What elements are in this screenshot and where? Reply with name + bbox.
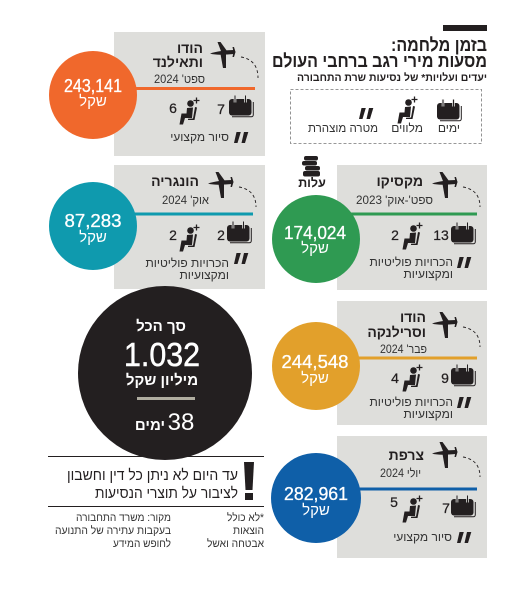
panel: Hungary: [49, 165, 265, 289]
cost circle: [272, 322, 360, 410]
icon: plane: [208, 172, 256, 207]
days and companions: 2: [391, 227, 399, 243]
panel: India and Thailand: [49, 32, 265, 156]
total circle: 1.032: [124, 336, 200, 373]
days and companions: [169, 222, 251, 252]
destination heading: הודו: [400, 309, 426, 325]
cost circle: [271, 453, 361, 543]
connector line: [350, 488, 477, 490]
days and companions: 7: [442, 500, 450, 516]
stated purpose: ומקצועיות: [404, 267, 453, 281]
stated purpose: סיור מקצועי: [170, 130, 229, 144]
icon: calendar legend: [437, 100, 461, 121]
stated purpose: סיור מקצועי: [393, 530, 452, 544]
cost circle: 243,141: [64, 76, 122, 96]
cost circle: שקל: [301, 370, 329, 387]
footnote: [207, 511, 265, 550]
destination heading: פבר' 2024: [380, 342, 427, 356]
cost circle: 282,961: [284, 484, 348, 504]
title: מסעות מירי רגב ברחבי העולם: [272, 50, 487, 71]
cost circle: שקל: [301, 240, 329, 257]
destination heading: ספט' 2024: [154, 72, 205, 86]
destination heading: ספט'-אוק' 2023: [356, 193, 433, 207]
footnote: אבטחה ואשל: [207, 537, 264, 550]
days and companions: [391, 364, 475, 392]
icon: plane: [210, 42, 258, 78]
destination heading: ותאילנד: [153, 54, 203, 70]
icon: coins: [302, 156, 320, 176]
days and companions: 7: [217, 101, 225, 117]
legend labels: מלווים: [391, 121, 423, 135]
panel: Mexico: [272, 165, 487, 290]
cost label: עלות: [298, 176, 326, 190]
footnote: *לא כולל: [227, 511, 265, 524]
stated purpose: [145, 253, 248, 282]
destination heading: [356, 173, 433, 207]
stated purpose: [369, 395, 471, 421]
callout text: עד היום לא ניתן כל דין וחשבון: [67, 467, 238, 484]
icon: companion seat legend: [398, 96, 418, 124]
cost circle: [49, 182, 137, 270]
days and companions: [390, 494, 475, 522]
cost circle: 174,024: [284, 223, 346, 243]
title: [272, 34, 487, 71]
icon: plane: [432, 312, 480, 347]
panel: India and Sri Lanka: [272, 301, 487, 425]
legend labels: ימים: [438, 121, 460, 135]
destination heading: הונגריה: [151, 173, 199, 189]
days and companions: [391, 222, 475, 250]
days and companions: 2: [169, 227, 177, 243]
days and companions: 13: [433, 227, 449, 243]
callout text: [67, 467, 238, 502]
stated purpose: הכרויות פוליטיות: [369, 255, 453, 269]
destination heading: [367, 309, 427, 356]
total circle: סך הכל: [136, 318, 186, 335]
connector line: [130, 212, 253, 216]
icon: plane: [432, 172, 480, 207]
destination heading: יולי 2024: [380, 466, 421, 480]
cost circle: [272, 195, 360, 283]
icon: quote legend: [359, 108, 373, 119]
destination heading: אוק' 2024: [162, 193, 209, 207]
total circle: מיליון שקל: [126, 372, 198, 389]
top accent bar: [443, 25, 487, 31]
icon: plane: [432, 442, 480, 477]
total circle: 38: [168, 409, 194, 436]
cost circle: [49, 51, 137, 139]
legend labels: [308, 121, 460, 135]
cost circle: שקל: [79, 229, 107, 246]
connector line: [350, 356, 477, 360]
footnote: הוצאות: [233, 525, 264, 537]
total circle: [78, 286, 252, 460]
callout: [48, 456, 264, 507]
icon: exclamation mark: [244, 462, 254, 500]
cost circle: 87,283: [64, 211, 122, 231]
days and companions: 5: [390, 494, 398, 510]
source note: לחופש המידע: [113, 537, 171, 550]
days and companions: 6: [169, 100, 177, 116]
cost circle: שקל: [79, 93, 107, 110]
stated purpose: ומקצועיות: [180, 268, 229, 282]
stated purpose: הכרויות פוליטיות: [145, 256, 229, 270]
callout text: לציבור על תוצרי הנסיעות: [95, 485, 238, 502]
source note: בעקבות עתירה של התנועה: [55, 524, 171, 537]
days and companions: 9: [441, 370, 449, 386]
stated purpose: [369, 255, 471, 281]
destination heading: הודו: [177, 40, 203, 56]
destination heading: [380, 447, 424, 480]
cost circle: שקל: [302, 502, 330, 519]
source note: [55, 512, 171, 550]
legend: [290, 90, 482, 144]
destination heading: [153, 40, 205, 86]
stated purpose: ומקצועיות: [404, 407, 453, 421]
connector line: [350, 212, 477, 216]
destination heading: [151, 173, 209, 207]
cost circle: 244,548: [282, 352, 348, 372]
days and companions: [169, 96, 253, 124]
connector line: [130, 87, 255, 90]
destination heading: וסרילנקה: [367, 324, 426, 340]
source note: מקור: משרד התחבורה: [76, 512, 171, 524]
destination heading: מקסיקו: [376, 173, 423, 189]
panel: France: [271, 436, 487, 558]
subtitle: יעדים ועלויות* של נסיעות שרת התחבורה: [297, 72, 487, 84]
stated purpose: הכרויות פוליטיות: [369, 395, 453, 409]
destination heading: צרפת: [389, 447, 424, 463]
title: בזמן מלחמה:: [391, 34, 487, 55]
days and companions: 2: [217, 227, 225, 243]
legend labels: מטרה מוצהרת: [308, 121, 378, 135]
total circle: ימים: [135, 417, 165, 434]
days and companions: 4: [391, 370, 399, 386]
